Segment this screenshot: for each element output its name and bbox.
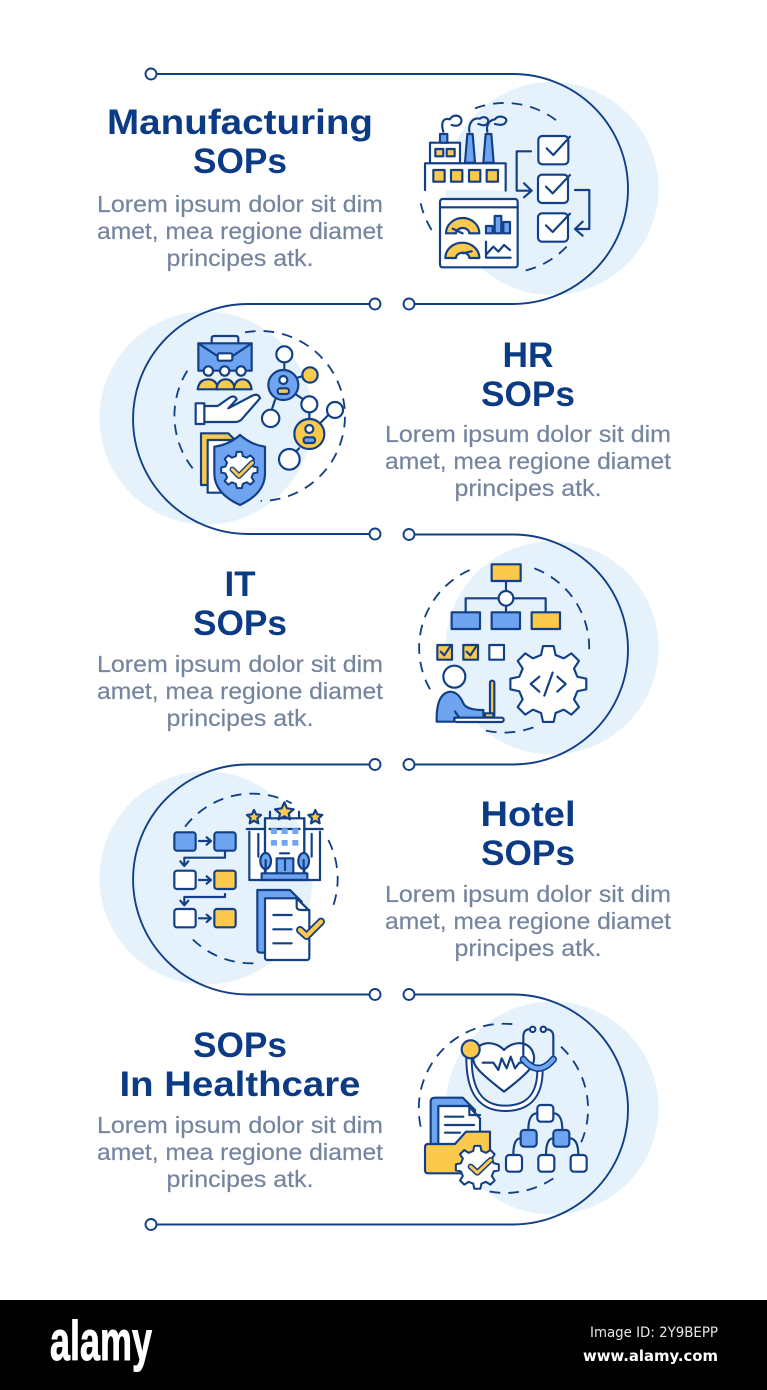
text block: healthcare description: principes atk. — [166, 1166, 314, 1192]
text block: hotel description: Lorem ipsum dolor sit dim — [385, 881, 671, 907]
text block: healthcare description: amet, mea regione diamet — [97, 1139, 383, 1165]
background blob: healthcare — [446, 1002, 658, 1214]
heading: SOPs In Healthcare: SOPs — [193, 1026, 287, 1065]
heading: Manufacturing SOPs: SOPs — [193, 142, 287, 181]
logo: alamy: alamy — [50, 1309, 152, 1372]
text block: HR description: Lorem ipsum dolor sit dim — [385, 421, 671, 447]
heading: HR SOPs: HR — [502, 336, 554, 375]
background blob: IT — [446, 542, 658, 754]
text block: hotel description: principes atk. — [454, 935, 602, 961]
icon: healthcare stethoscope, folder and hierarchy — [419, 1024, 588, 1193]
icon: IT org chart, developer and code gear — [419, 564, 589, 733]
heading: HR SOPs: SOPs — [481, 375, 575, 414]
icon: hotel, flowchart and document — [174, 794, 338, 963]
text block: hotel description — [385, 881, 671, 961]
heading: IT SOPs — [193, 565, 287, 643]
icon: factory, dashboard and checklist — [421, 103, 589, 271]
heading: SOPs In Healthcare — [120, 1026, 360, 1104]
website: www.alamy.com — [583, 1347, 718, 1365]
connector line: healthcare — [146, 989, 628, 1230]
connector line: HR — [133, 298, 380, 540]
text block: HR description — [385, 421, 671, 501]
heading: Manufacturing SOPs — [107, 103, 373, 181]
text block: IT description: Lorem ipsum dolor sit dim — [97, 651, 383, 677]
heading: HR SOPs — [481, 336, 575, 414]
background blob: hotel — [100, 772, 312, 984]
text block: IT description — [97, 651, 383, 731]
heading: Hotel SOPs: Hotel — [480, 795, 576, 834]
heading: IT SOPs: IT — [224, 565, 256, 604]
heading: IT SOPs: SOPs — [193, 604, 287, 643]
icon: HR briefcase, hand, network and shield — [174, 331, 345, 505]
heading: Hotel SOPs — [480, 795, 576, 873]
background blob: HR — [100, 312, 312, 524]
text block: IT description: principes atk. — [166, 705, 314, 731]
text block: IT description: amet, mea regione diamet — [97, 678, 383, 704]
text block: healthcare description: Lorem ipsum dolor sit dim — [97, 1112, 383, 1138]
connector line: manufacturing — [146, 68, 628, 310]
connector line: hotel — [133, 759, 380, 1000]
text block: HR description: principes atk. — [454, 475, 602, 501]
text block: manufacturing description: amet, mea regione diamet — [97, 218, 383, 244]
connector line: IT — [404, 529, 628, 770]
image id: Image ID: 2Y9BEPP — [590, 1325, 718, 1341]
text block: manufacturing description: Lorem ipsum dolor sit dim — [97, 191, 383, 217]
heading: Manufacturing SOPs: Manufacturing — [107, 103, 373, 142]
heading: SOPs In Healthcare: In Healthcare — [120, 1065, 360, 1104]
text block: manufacturing description: principes atk. — [166, 245, 314, 271]
background blob: manufacturing — [446, 82, 658, 295]
footer band: alamy — [0, 1300, 767, 1390]
text block: hotel description: amet, mea regione diamet — [385, 908, 671, 934]
text block: HR description: amet, mea regione diamet — [385, 448, 671, 474]
text block: healthcare description — [97, 1112, 383, 1192]
heading: Hotel SOPs: SOPs — [481, 834, 575, 873]
text block: manufacturing description — [97, 191, 383, 271]
